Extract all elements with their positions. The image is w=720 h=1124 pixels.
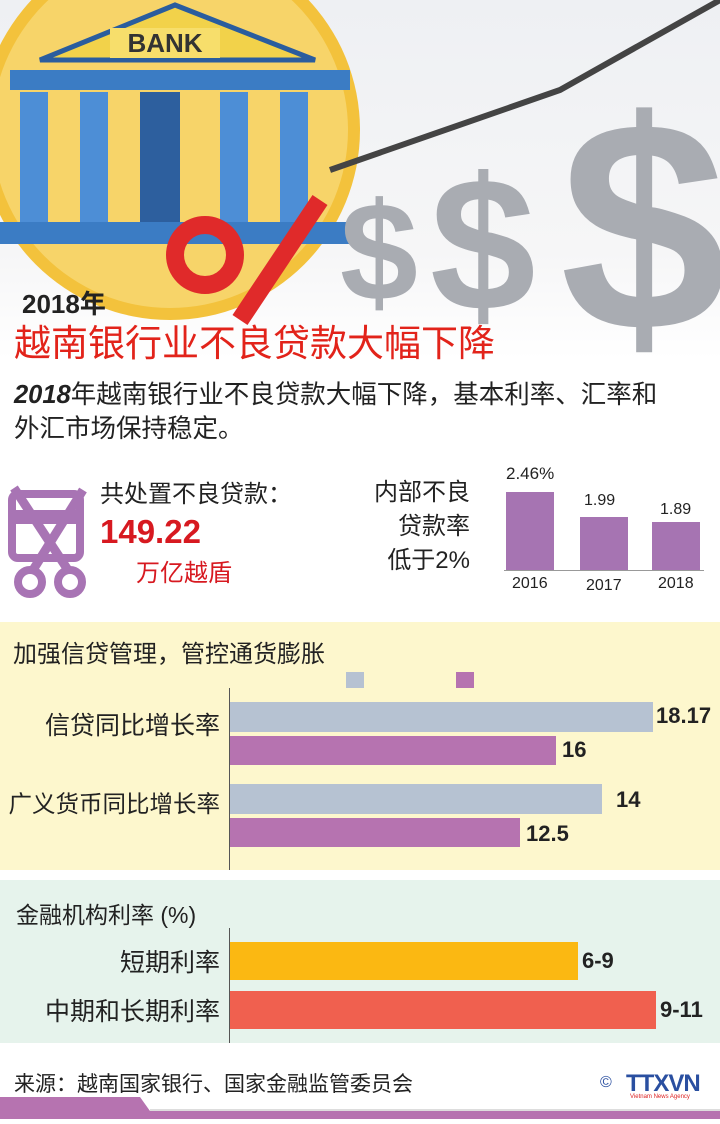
icon: scissors card	[8, 486, 87, 598]
bars: credit growth: 16	[562, 737, 586, 762]
logo: ©	[600, 1074, 612, 1091]
bar chart: NPL ratio: 2016	[512, 575, 548, 592]
panel: interest rates: 9-11	[660, 997, 703, 1022]
heading: 金融机构利率 (%)	[16, 902, 196, 928]
stat: disposed NPL: 149.22	[100, 513, 201, 550]
bar chart: NPL ratio: 2.46%	[506, 464, 554, 483]
icon: dollar signs: $	[340, 173, 418, 330]
bar chart: NPL ratio: 1.99	[584, 492, 615, 509]
stat: disposed NPL: 共处置不良贷款：	[100, 481, 292, 508]
panel: credit management	[0, 622, 720, 870]
icon: percent	[175, 200, 320, 320]
icon: sun circle	[0, 0, 360, 320]
short-term rate: 短期利率	[120, 949, 220, 977]
icon: trend line	[330, 0, 720, 170]
icon: dollar signs	[340, 58, 720, 394]
stat: disposed NPL: 万亿越盾	[136, 560, 232, 587]
icon: bank building	[0, 5, 360, 244]
mid/long-term rate: 中期和长期利率	[45, 998, 220, 1026]
icon: dollar signs: $	[430, 139, 536, 351]
bars: credit growth: 18.17	[656, 703, 711, 728]
intro text: 外汇市场保持稳定。	[14, 415, 244, 443]
intro text	[14, 381, 657, 443]
logo	[600, 1070, 700, 1100]
header illustration	[0, 0, 720, 360]
title: 越南银行业不良贷款大幅下降	[14, 323, 495, 364]
logo: Vietnam News Agency	[630, 1094, 690, 1100]
bars: credit growth	[230, 702, 711, 765]
heading: 加强信贷管理，管控通货膨胀	[13, 641, 325, 668]
bar chart: NPL ratio: 1.89	[660, 501, 691, 518]
stat: NPL ratio: 内部不良	[374, 479, 470, 506]
stat: NPL ratio	[374, 479, 470, 574]
stat: NPL ratio: 低于2%	[387, 547, 470, 574]
icon: bank building: BANK	[127, 28, 203, 58]
title	[14, 289, 495, 364]
bars: M2 growth: 14	[616, 787, 640, 812]
footer band	[0, 1097, 720, 1119]
intro text: 2018年越南银行业不良贷款大幅下降，基本利率、汇率和	[14, 381, 657, 409]
stat: disposed NPL	[100, 481, 292, 587]
stat: NPL ratio: 贷款率	[398, 513, 470, 540]
bar chart: NPL ratio: 2017	[586, 577, 622, 594]
bar chart: NPL ratio	[504, 464, 704, 594]
bars: M2 growth: 12.5	[526, 821, 569, 846]
panel: interest rates: 6-9	[582, 948, 614, 973]
logo: TTXVN	[626, 1070, 700, 1097]
source: 来源：越南国家银行、国家金融监管委员会	[14, 1073, 413, 1096]
bar chart: NPL ratio: 2018	[658, 575, 694, 592]
label: 广义货币同比增长率	[8, 791, 220, 817]
label: 信贷同比增长率	[45, 712, 220, 740]
panel: interest rates	[0, 880, 720, 1043]
bars: M2 growth	[230, 784, 640, 847]
legend	[346, 672, 474, 688]
title: 2018年	[22, 289, 106, 319]
